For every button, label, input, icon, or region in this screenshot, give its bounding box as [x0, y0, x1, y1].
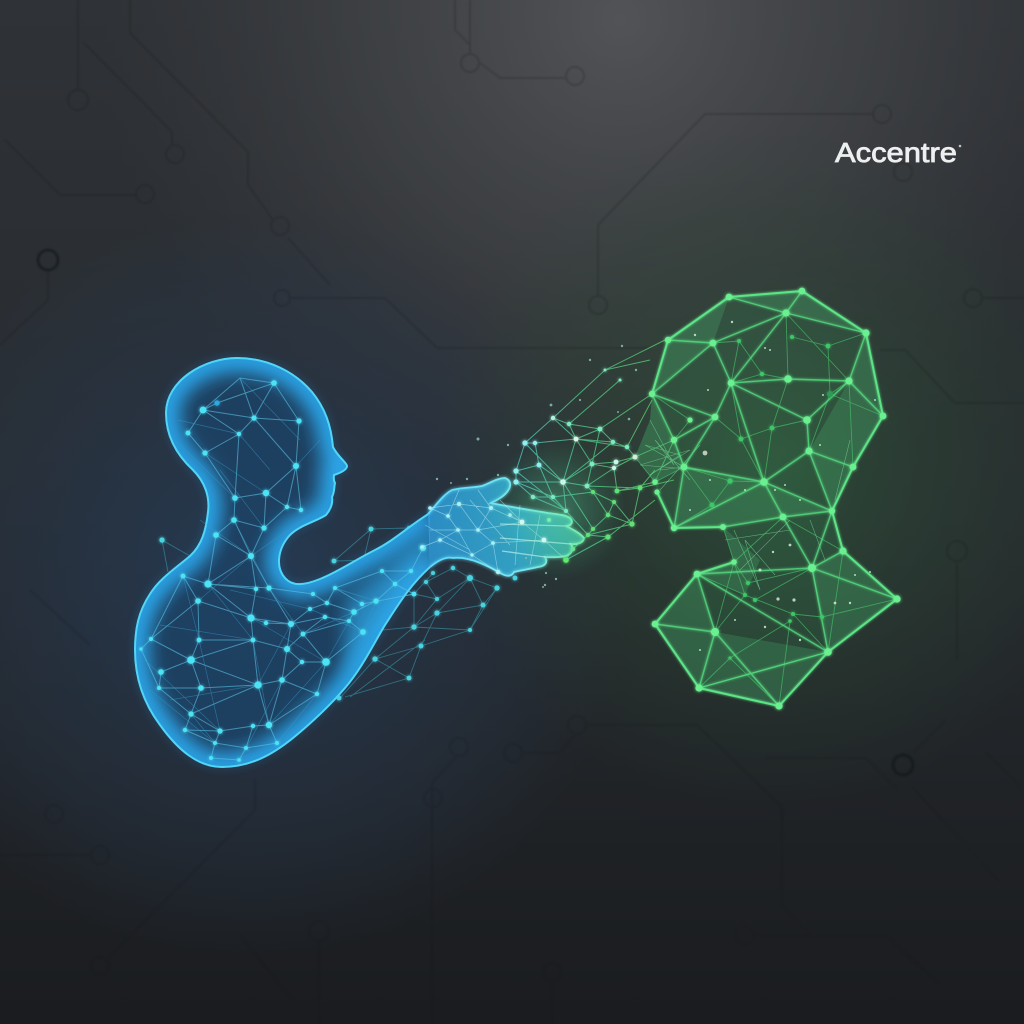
brighter facets — [635, 291, 897, 706]
blue human figure — [135, 358, 440, 767]
blue hand reaching right — [420, 478, 584, 576]
hand mesh lines — [422, 490, 566, 572]
figure rim — [135, 358, 430, 767]
figure network lines — [141, 378, 423, 760]
darker circuit nodes — [38, 250, 913, 775]
green geometric head — [633, 288, 901, 710]
head edges — [652, 291, 897, 706]
glow where hand meets the network — [486, 440, 626, 580]
hand finger lines — [500, 524, 571, 557]
figure fine secondary lines — [145, 378, 395, 760]
head nodes — [633, 288, 901, 710]
outer glow of figure — [135, 358, 430, 767]
head facets fill — [635, 291, 897, 706]
head silhouette edge — [652, 291, 897, 706]
logo: Accentre: Accentre — [835, 137, 957, 168]
head sparkle particles — [689, 321, 876, 651]
central dissolving particle network — [436, 340, 674, 588]
loose particles — [436, 345, 637, 588]
figure body fill — [135, 358, 430, 767]
outer network around the arm — [159, 520, 517, 700]
hand nodes — [420, 502, 575, 574]
head inner thin lines — [635, 313, 897, 706]
figure nodes — [139, 380, 426, 762]
hand rim — [428, 478, 584, 576]
head face mesh — [635, 420, 850, 590]
hand fill — [428, 478, 584, 576]
figure inner edge glow — [135, 358, 440, 767]
